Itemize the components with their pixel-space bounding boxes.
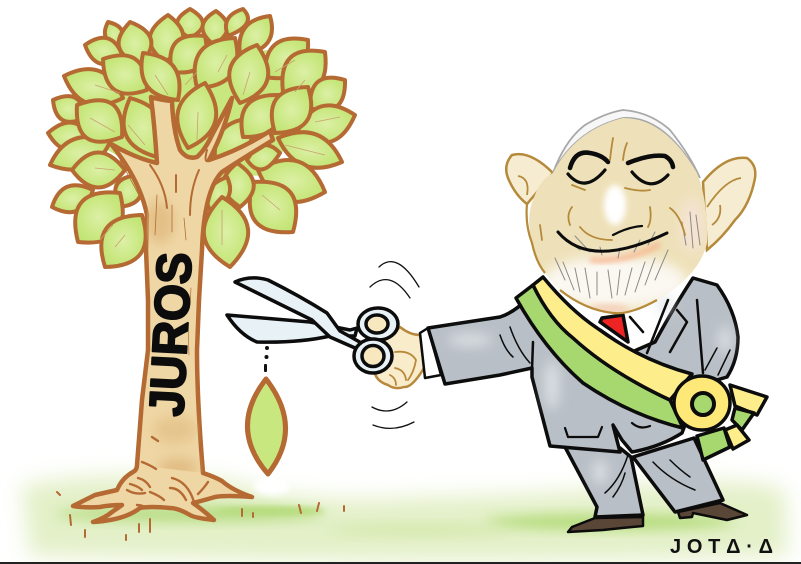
hair: [553, 110, 700, 178]
ground: green grass wash: [22, 476, 788, 561]
grass tufts: [57, 492, 344, 540]
jacket detail lines: [500, 300, 730, 497]
canopy: front leaf over the trunk: [141, 53, 180, 100]
smile: [558, 232, 667, 251]
trunk with branches and roots: [73, 97, 273, 522]
sash medallion: [674, 376, 730, 430]
closed eyes: [568, 170, 668, 184]
presidential sash: [516, 277, 767, 460]
trousers: [565, 438, 723, 517]
trunk shading: [146, 200, 198, 478]
sash green stripe: [516, 285, 683, 428]
upper ring opening: [366, 315, 388, 333]
right ear: [703, 158, 755, 250]
sash yellow stripe: [533, 277, 692, 400]
head: [506, 110, 755, 314]
jacket highlights: [448, 295, 731, 484]
trunk bark and root marks: [120, 150, 210, 508]
falling leaf: [247, 379, 286, 474]
scissors: [227, 278, 398, 373]
hand: [375, 327, 424, 388]
ear inner marks: [518, 176, 741, 225]
medallion center: [692, 393, 714, 415]
beard strokes: [555, 212, 700, 298]
eyebrows: [570, 153, 673, 168]
signature: JOTΔ·Δ: [670, 536, 773, 558]
face shading: beard, nose highlight, lips: [543, 185, 704, 314]
canopy: back leaves: [48, 9, 355, 267]
lower finger ring: [354, 339, 392, 373]
finger lines: [390, 352, 416, 385]
motion lines: [370, 262, 419, 428]
jacket: [428, 278, 738, 452]
arm and jacket: [375, 277, 767, 532]
left ear: [506, 154, 553, 204]
face wrinkles and nose: [540, 138, 685, 240]
necktie: [600, 315, 628, 342]
label: JUROS on the trunk: JUROS: [140, 251, 203, 418]
lower blade: [227, 315, 357, 342]
face outline: [527, 204, 657, 313]
upper blade: [235, 278, 365, 348]
upper finger ring: [358, 308, 398, 340]
sash ribbon tails: [730, 385, 767, 415]
face: [529, 118, 707, 313]
bottom border: [0, 562, 801, 564]
dotted fall line: [264, 346, 269, 372]
shirt cuff: [420, 328, 441, 378]
lower ring opening: [362, 346, 384, 366]
shoes: [568, 503, 747, 532]
nostril: [613, 226, 642, 235]
tree: [48, 9, 355, 540]
leaf veins: [90, 55, 340, 247]
